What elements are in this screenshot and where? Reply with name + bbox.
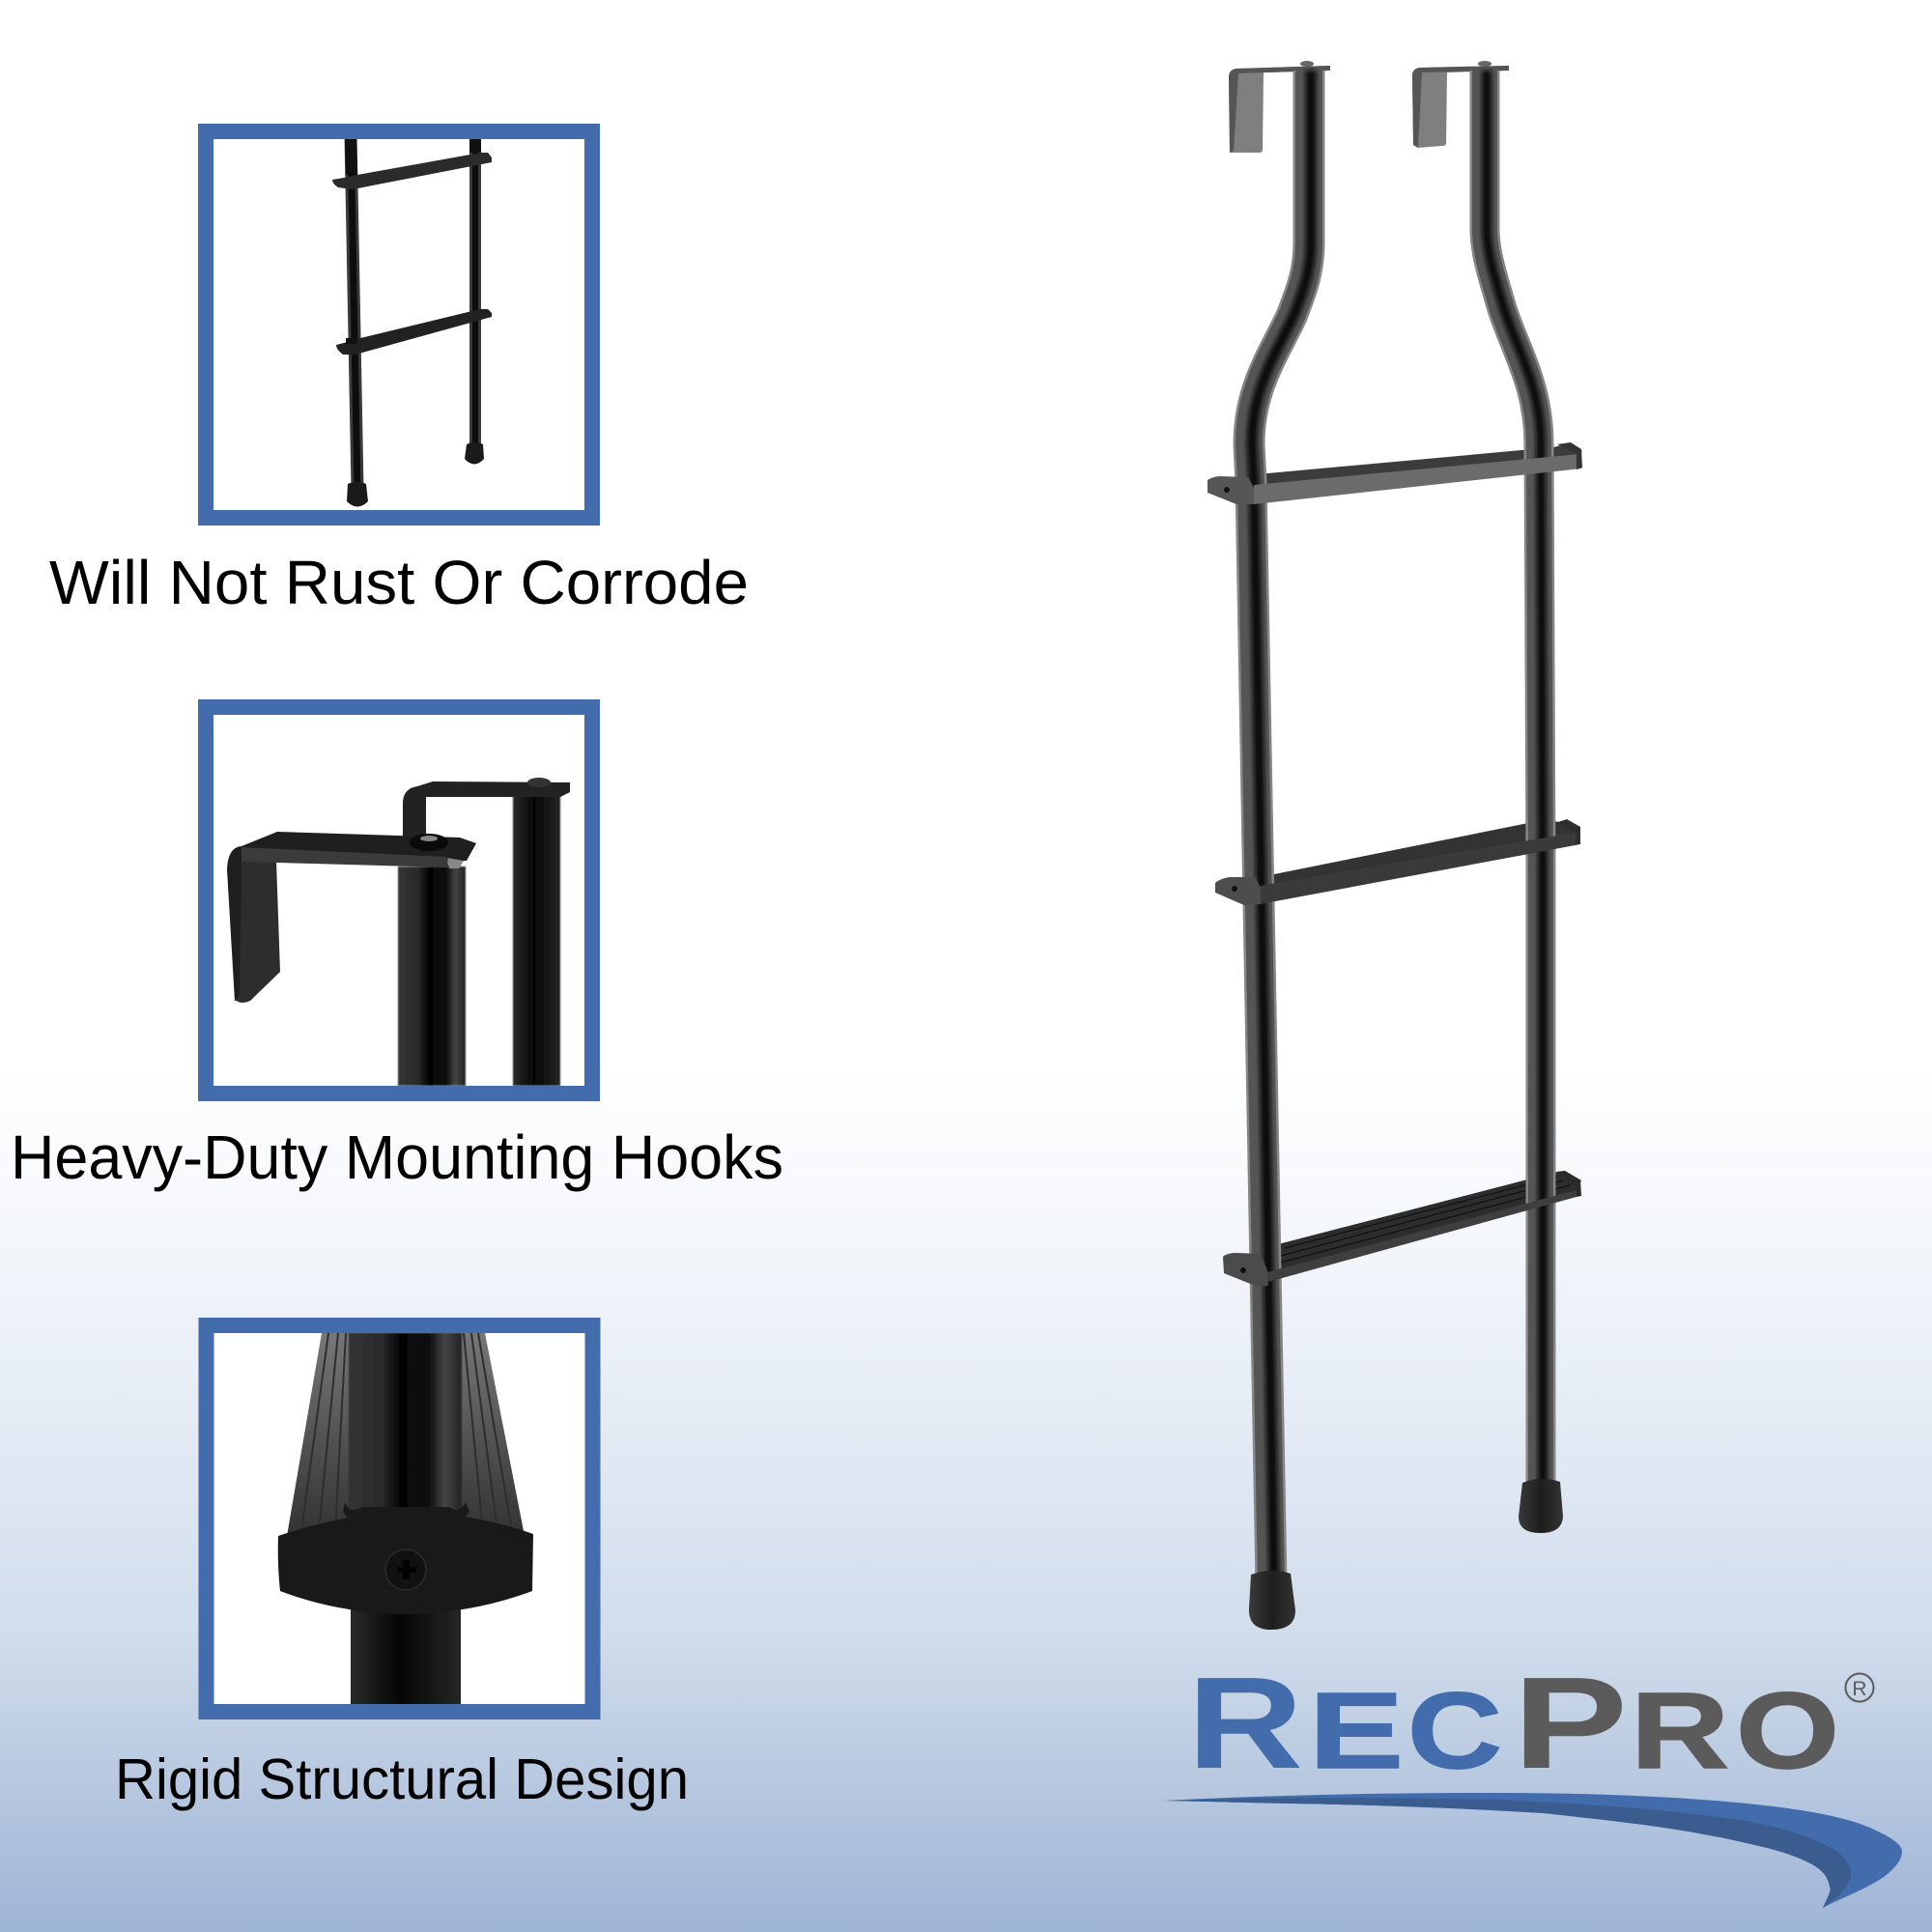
heading: Rigid Structural Design: Rigid Structural Design bbox=[115, 1747, 689, 1811]
heading: Heavy-Duty Mounting Hooks: Heavy-Duty Mounting Hooks bbox=[11, 1122, 783, 1192]
logo swoosh bbox=[1165, 1793, 1902, 1908]
left rail tube bbox=[1249, 71, 1311, 1584]
logo: RecPro: C bbox=[1407, 1670, 1502, 1791]
main ladder product image bbox=[1208, 61, 1582, 1630]
heading: Will Not Rust Or Corrode: Will Not Rust Or Corrode bbox=[49, 548, 749, 617]
icon: ladder lower section bbox=[332, 135, 492, 506]
step 2 front and caps bbox=[1215, 819, 1580, 905]
logo: RecPro: O bbox=[1736, 1670, 1839, 1791]
registered mark: R bbox=[1852, 1678, 1867, 1700]
logo: RecPro: P bbox=[1513, 1650, 1628, 1796]
icon: mounting hooks bbox=[1229, 61, 1509, 153]
panel: heavy-duty mounting hooks bbox=[206, 707, 592, 1094]
step 1 front and caps bbox=[1208, 442, 1582, 504]
panel: rigid structural design bbox=[207, 1325, 593, 1712]
step 3 front and caps bbox=[1223, 1171, 1581, 1287]
icon: rubber feet bbox=[1249, 1479, 1563, 1630]
icon: step end cap close-up bbox=[278, 1333, 533, 1704]
logo: RecPro: E bbox=[1309, 1670, 1404, 1791]
logo: RecPro: R bbox=[1631, 1670, 1729, 1791]
right rail tube bbox=[1485, 71, 1543, 1488]
panel: will not rust or corrode bbox=[206, 131, 592, 518]
step treads top surfaces bbox=[1246, 443, 1582, 1273]
icon: hook close-up bbox=[227, 778, 570, 1086]
logo: RecPro bbox=[1165, 1650, 1902, 1908]
registered mark bbox=[1845, 1673, 1874, 1702]
logo: RecPro: R bbox=[1187, 1650, 1303, 1796]
